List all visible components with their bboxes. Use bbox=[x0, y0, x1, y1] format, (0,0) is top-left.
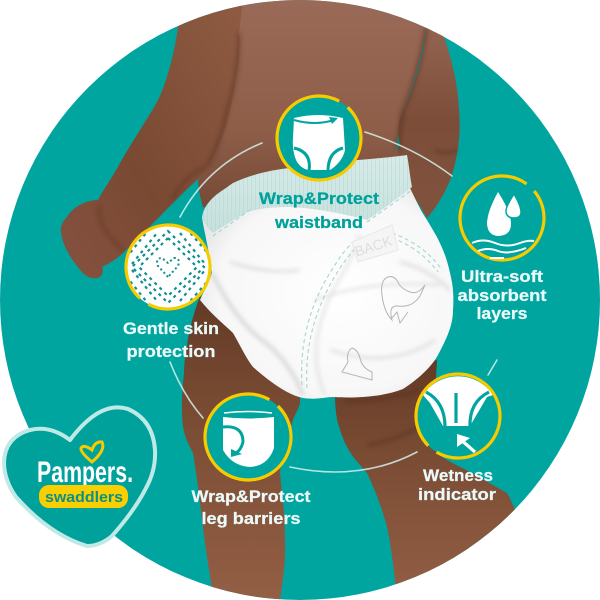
back label bbox=[352, 225, 398, 262]
icon: waistband pants bbox=[260, 79, 378, 197]
swaddlers text: swaddlers bbox=[45, 489, 123, 506]
label: absorbent layers bbox=[458, 267, 547, 323]
photo: baby and diaper bbox=[61, 0, 530, 600]
logo: Pampers Swaddlers heart bbox=[4, 407, 155, 546]
icon: wetness indicator bbox=[399, 357, 517, 475]
label: gentle skin protection: Gentle skin bbox=[123, 319, 219, 338]
swaddlers pill bbox=[39, 485, 128, 508]
connecting ring segments bbox=[170, 132, 497, 472]
left arm bbox=[61, 0, 243, 278]
icon: leg barrier cup bbox=[187, 376, 309, 498]
torso bbox=[198, 0, 430, 215]
logo heart bbox=[81, 442, 103, 462]
diaper shading bbox=[212, 235, 450, 395]
label: waistband bbox=[259, 189, 379, 232]
diaper body bbox=[200, 188, 453, 399]
left leg bbox=[182, 296, 300, 600]
right leg bbox=[335, 360, 515, 584]
label: wetness indicator bbox=[418, 466, 496, 504]
icon: drops and waves bbox=[443, 159, 561, 277]
label: leg barriers bbox=[192, 487, 311, 528]
seal prints bbox=[342, 277, 425, 380]
back label: BACK bbox=[353, 232, 395, 259]
label: gentle skin protection bbox=[123, 319, 219, 361]
label: waistband: Wrap&Protect bbox=[259, 189, 379, 208]
label: leg barriers: leg barriers bbox=[202, 509, 300, 528]
feature: wetness indicator bbox=[399, 357, 517, 504]
feature: leg barriers bbox=[187, 376, 311, 528]
label: absorbent layers: layers bbox=[476, 304, 528, 323]
feature: absorbent layers bbox=[443, 159, 561, 323]
label: wetness indicator: indicator bbox=[418, 485, 496, 504]
feature: gentle skin protection bbox=[124, 223, 218, 361]
label: absorbent layers: absorbent bbox=[458, 286, 547, 305]
label: absorbent layers: Ultra-soft bbox=[461, 267, 543, 286]
body creases bbox=[99, 28, 457, 445]
label: waistband: waistband bbox=[274, 213, 363, 232]
heart badge bbox=[4, 407, 155, 546]
label: gentle skin protection: protection bbox=[126, 342, 216, 361]
diaper stitching bbox=[213, 190, 442, 388]
feature: waistband bbox=[259, 79, 379, 232]
waistband bbox=[202, 155, 412, 233]
teal gap beside torso bbox=[396, 133, 400, 152]
label: wetness indicator: Wetness bbox=[423, 466, 493, 485]
label: leg barriers: Wrap&Protect bbox=[192, 487, 311, 506]
right arm bbox=[398, 28, 460, 218]
Pampers wordmark: Pampers. bbox=[37, 456, 133, 489]
icon: dotted heart pattern bbox=[124, 223, 212, 311]
